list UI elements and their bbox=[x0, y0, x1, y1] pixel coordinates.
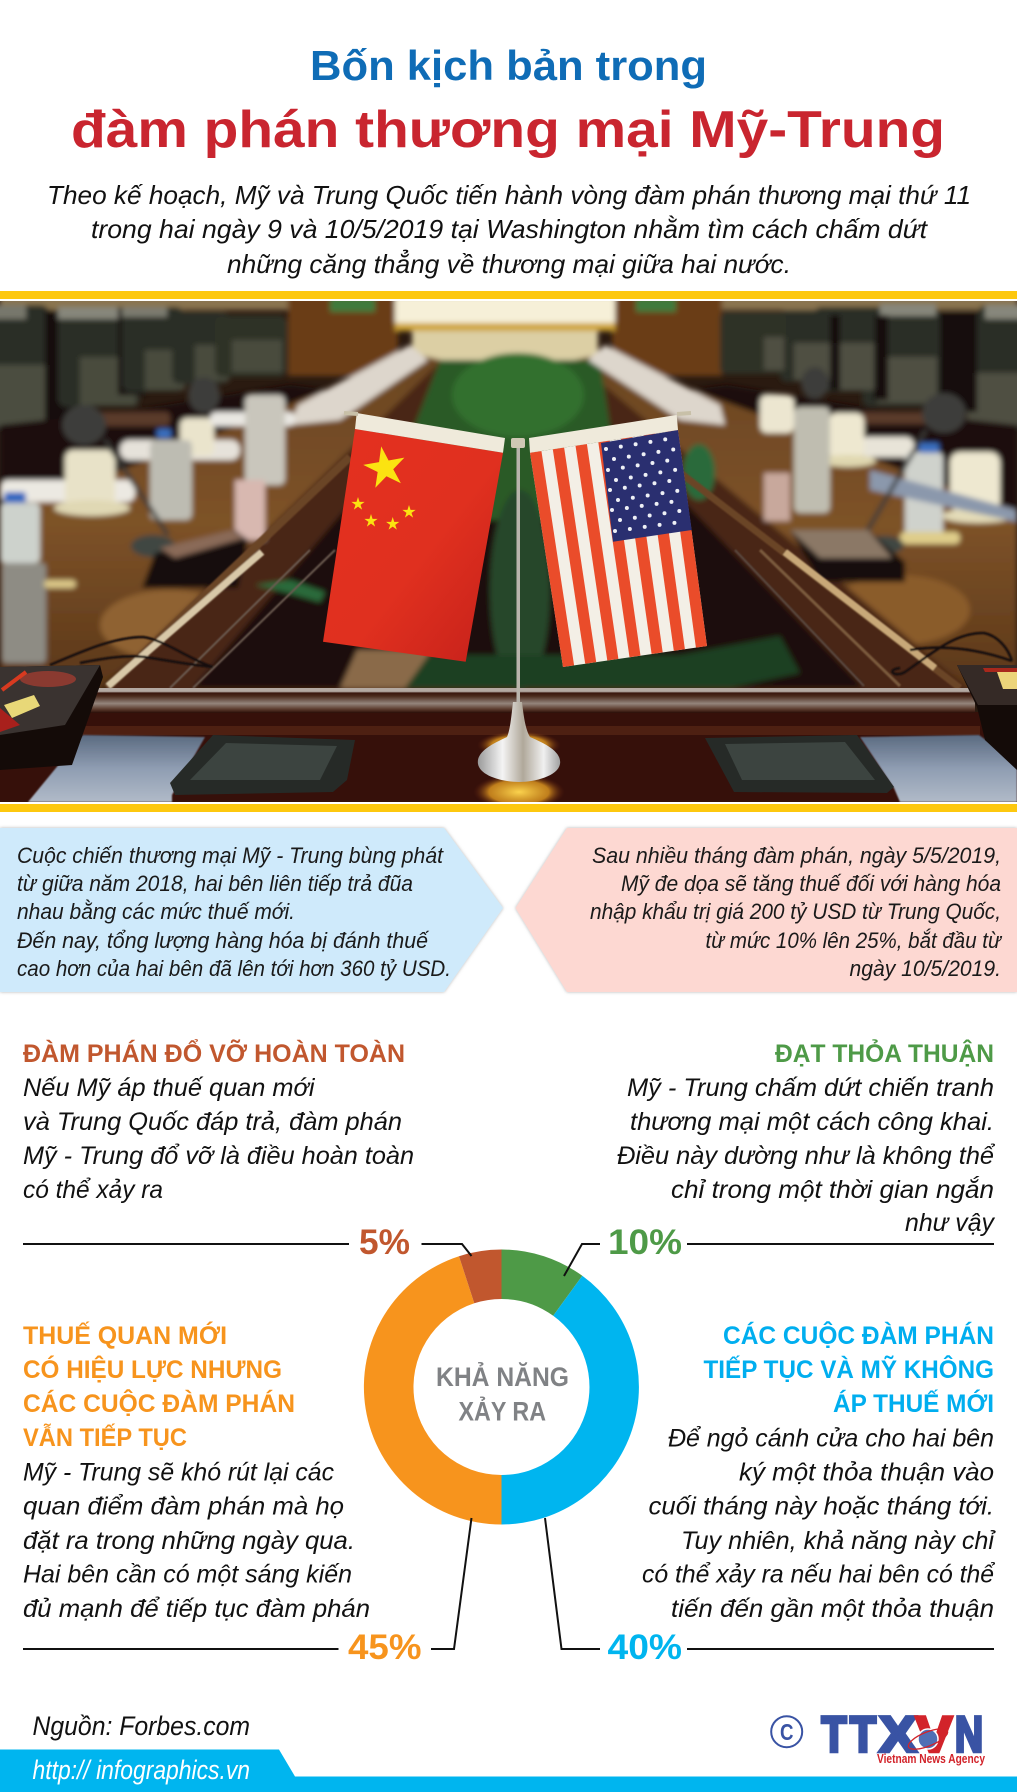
flag: United States bbox=[529, 415, 707, 667]
chairs right bbox=[977, 305, 1017, 430]
body text: Mỹ - Trung sẽ khó rút lại các bbox=[23, 1458, 334, 1486]
callout: 5% bbox=[23, 1223, 472, 1262]
body text bbox=[617, 1074, 995, 1237]
panel text bbox=[590, 843, 1003, 981]
body text: đủ mạnh để tiếp tục đàm phán bbox=[23, 1595, 370, 1623]
body text bbox=[23, 1458, 370, 1623]
right desk control box bbox=[957, 665, 1017, 770]
panel text: từ mức 10% lên 25%, bắt đầu từ bbox=[706, 928, 1003, 953]
body text: đặt ra trong những ngày qua. bbox=[23, 1527, 355, 1555]
website url: http:// infographics.vn bbox=[32, 1755, 250, 1785]
note pads bbox=[170, 735, 894, 795]
body text: có thể xảy ra bbox=[23, 1176, 163, 1204]
intro text: Theo kế hoạch, Mỹ và Trung Quốc tiến hành vòng đàm phán thương mại thứ 11 bbox=[47, 180, 971, 210]
segment: 40% bbox=[502, 1276, 639, 1524]
donut centre label: KHẢ NĂNG bbox=[436, 1360, 569, 1392]
heading: CÁC CUỘC ĐÀM PHÁN bbox=[723, 1320, 994, 1350]
scenario: reach a deal bbox=[617, 1038, 995, 1237]
heading: VẪN TIẾP TỤC bbox=[23, 1422, 187, 1452]
blurred room background bbox=[0, 296, 1017, 693]
body text: Để ngỏ cánh cửa cho hai bên bbox=[668, 1424, 994, 1452]
body text: quan điểm đàm phán mà họ bbox=[23, 1492, 344, 1520]
agency name: Vietnam News Agency bbox=[877, 1751, 986, 1766]
microphones bbox=[62, 405, 106, 445]
callout: 40%: 40% bbox=[608, 1628, 682, 1667]
donut centre label bbox=[436, 1360, 569, 1426]
heading bbox=[704, 1320, 994, 1418]
callout: 45%: 45% bbox=[348, 1628, 422, 1667]
source: Nguồn: Forbes.com bbox=[32, 1711, 250, 1741]
intro text: những căng thẳng về thương mại giữa hai nước. bbox=[227, 249, 791, 279]
body text: Mỹ - Trung đổ vỡ là điều hoàn toàn bbox=[23, 1142, 414, 1170]
panel text: Mỹ đe dọa sẽ tăng thuế đối với hàng hóa bbox=[621, 871, 1001, 896]
left desk control box bbox=[0, 665, 103, 770]
heading: TIẾP TỤC VÀ MỸ KHÔNG bbox=[704, 1354, 994, 1384]
table item rows bbox=[290, 345, 428, 425]
chairs left bbox=[0, 305, 50, 430]
body text: Điều này dường như là không thể bbox=[617, 1142, 995, 1170]
heading bbox=[23, 1320, 295, 1452]
body text: Tuy nhiên, khả năng này chỉ bbox=[681, 1527, 996, 1555]
agency letters: N bbox=[955, 1706, 983, 1762]
segment: 10% bbox=[502, 1250, 582, 1316]
body text bbox=[23, 1074, 414, 1204]
callout: 5%: 5% bbox=[359, 1223, 410, 1262]
callout: 45% bbox=[23, 1518, 472, 1667]
heading: CÓ HIỆU LỰC NHƯNG bbox=[23, 1354, 282, 1384]
heading: ĐẠT THỎA THUẬN bbox=[775, 1038, 994, 1068]
callout: 40% bbox=[545, 1518, 994, 1667]
donut centre label: XẢY RA bbox=[458, 1394, 546, 1426]
copyright mark: C bbox=[780, 1719, 794, 1745]
agency letters: X bbox=[880, 1706, 916, 1762]
agency letters: T bbox=[822, 1706, 846, 1762]
dark band behind table bbox=[0, 385, 330, 520]
table edge band bbox=[84, 688, 975, 713]
agency letters: T bbox=[850, 1706, 876, 1762]
table edge highlights bbox=[50, 457, 1012, 688]
body text: cuối tháng này hoặc tháng tới. bbox=[648, 1492, 994, 1520]
wall bbox=[0, 296, 1017, 310]
panel text: nhau bằng các mức thuế mới. bbox=[17, 899, 295, 924]
heading: CÁC CUỘC ĐÀM PHÁN bbox=[23, 1388, 295, 1418]
panel: tariff threat bbox=[516, 828, 1017, 992]
segment: 45% bbox=[364, 1256, 502, 1525]
panel text: Sau nhiều tháng đàm phán, ngày 5/5/2019, bbox=[592, 843, 1001, 868]
body text bbox=[642, 1424, 996, 1623]
photo: China and US flags on a conference table bbox=[0, 296, 1017, 810]
agency letters bbox=[822, 1706, 983, 1762]
scenario: talks continue, no new tariffs bbox=[642, 1320, 996, 1623]
panel text: Đến nay, tổng lượng hàng hóa bị đánh thuế bbox=[17, 928, 430, 953]
flag: China bbox=[323, 413, 505, 662]
heading: ĐÀM PHÁN ĐỔ VỠ HOÀN TOÀN bbox=[23, 1038, 405, 1068]
panel text: cao hơn của hai bên đã lên tới hơn 360 tỷ USD. bbox=[17, 956, 451, 981]
panel text: nhập khẩu trị giá 200 tỷ USD từ Trung Quốc, bbox=[590, 899, 1001, 924]
scenario: talks collapse bbox=[23, 1038, 414, 1204]
intro text bbox=[47, 180, 971, 279]
segment: 5% bbox=[459, 1250, 502, 1303]
scenario: new tariffs, talks continue bbox=[23, 1320, 370, 1623]
body text: chỉ trong một thời gian ngắn bbox=[671, 1175, 994, 1204]
intro text: trong hai ngày 9 và 10/5/2019 tại Washington nhằm tìm cách chấm dứt bbox=[91, 214, 929, 244]
body text: ký một thỏa thuận vào bbox=[739, 1458, 994, 1486]
agency letters: V bbox=[916, 1706, 953, 1762]
callout: 10%: 10% bbox=[608, 1223, 682, 1262]
body text: tiến đến gần một thỏa thuận bbox=[671, 1595, 994, 1623]
panel text bbox=[17, 843, 451, 981]
panel text: ngày 10/5/2019. bbox=[850, 956, 1001, 981]
body text: Nếu Mỹ áp thuế quan mới bbox=[23, 1074, 316, 1102]
title line 1: Bốn kịch bản trong bbox=[310, 42, 707, 89]
plants bbox=[405, 360, 612, 520]
title line 2: đàm phán thương mại Mỹ-Trung bbox=[71, 101, 945, 159]
heading: ÁP THUẾ MỚI bbox=[833, 1388, 994, 1418]
body text: như vậy bbox=[905, 1209, 995, 1237]
flag stand bbox=[344, 413, 691, 782]
heading: THUẾ QUAN MỚI bbox=[23, 1320, 227, 1350]
donut chart bbox=[364, 1250, 639, 1525]
body text: có thể xảy ra nếu hai bên có thể bbox=[642, 1560, 995, 1588]
front table surface bbox=[0, 712, 1017, 804]
table surfaces bbox=[0, 355, 450, 690]
globe bbox=[906, 1725, 950, 1753]
body text: Hai bên cần có một sáng kiến bbox=[23, 1560, 352, 1588]
name-card trays bbox=[142, 530, 248, 588]
body text: và Trung Quốc đáp trả, đàm phán bbox=[23, 1108, 402, 1136]
copyright mark bbox=[771, 1716, 802, 1747]
panel: trade war background bbox=[0, 828, 503, 992]
sunken centre of table bbox=[100, 362, 974, 693]
panel text: từ giữa năm 2018, hai bên liên tiếp trả đũa bbox=[17, 871, 413, 896]
panel text: Cuộc chiến thương mại Mỹ - Trung bùng phát bbox=[17, 843, 444, 868]
title bbox=[71, 42, 945, 159]
body text: thương mại một cách công khai. bbox=[630, 1108, 994, 1136]
logo: TTXVN bbox=[771, 1706, 986, 1766]
footer band bbox=[0, 1750, 1017, 1792]
body text: Mỹ - Trung chấm dứt chiến tranh bbox=[627, 1074, 994, 1102]
callout: 10% bbox=[564, 1223, 994, 1276]
